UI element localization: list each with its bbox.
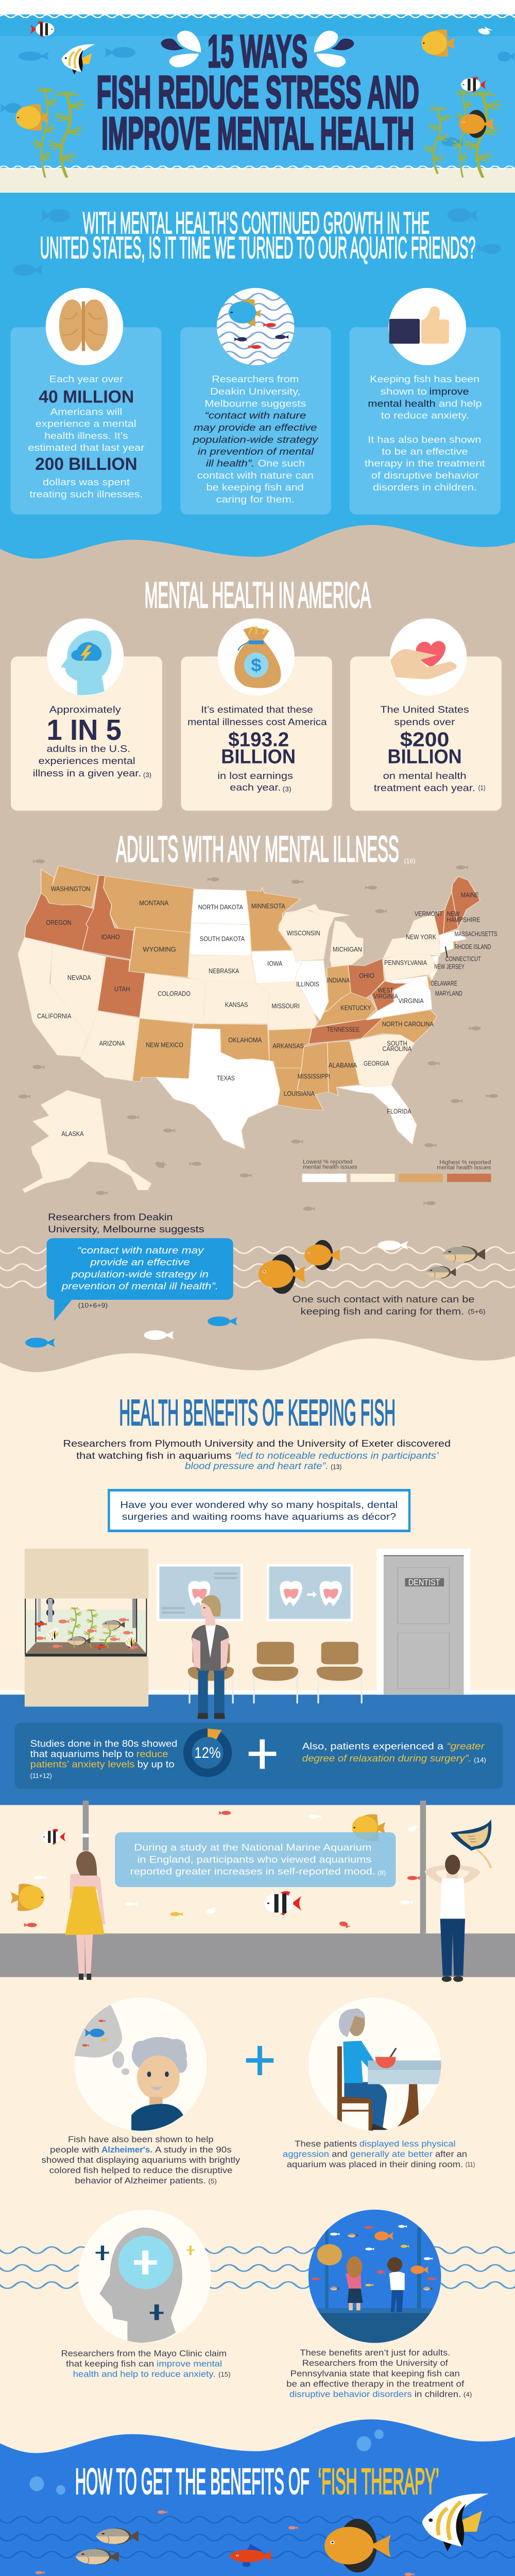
state labels: VIRGINIA: [399, 997, 424, 1005]
panel: keeping fish improves mental health: [350, 288, 501, 515]
text: Alzheimer's study: behavior of Alzheimer patients.: [75, 2176, 206, 2185]
illustration: dentist door: DENTIST: [408, 1578, 440, 1587]
state labels: SOUTH: [387, 1040, 407, 1047]
panel: 1 in 5 adults: [11, 618, 162, 811]
panel: 40 million: health illness. It’s: [44, 431, 128, 441]
icon: hand holding heart: [390, 641, 457, 679]
text: Mayo Clinic: that keeping fish can: [66, 2359, 154, 2369]
panel: 40 million: [10, 288, 162, 515]
fish group: [11, 1811, 420, 1929]
state labels: PENNSYLVANIA: [384, 959, 427, 967]
stat: 12 percent anxiety reduction: by up to: [138, 1759, 175, 1770]
callout: speech bubble quote: population-wide strategy in: [71, 1269, 209, 1279]
text: one such contact: [293, 1294, 486, 1317]
state labels: ALABAMA: [329, 1062, 357, 1070]
icon: head with storm cloud: [61, 630, 111, 695]
panel: Deakin University nature quote: contact with nature can: [197, 470, 314, 481]
text: Plymouth research: (13): [331, 1463, 341, 1470]
text: relaxation during surgery: “greater: [447, 1741, 485, 1752]
panel: keeping fish improves mental health: improve: [430, 386, 469, 397]
section: mental health in America: [11, 574, 502, 869]
panel: Deakin University nature quote: caring for them.: [216, 494, 295, 504]
panel: keeping fish improves mental health: and help: [439, 398, 482, 409]
stat: 12 percent anxiety reduction: (11+12): [30, 1772, 52, 1780]
state labels: CALIFORNIA: [37, 1012, 72, 1020]
state labels: MONTANA: [139, 900, 168, 907]
text: Mayo Clinic: (15): [218, 2370, 231, 2378]
state labels: NORTH CAROLINA: [382, 1021, 434, 1028]
chart: donut 12%: [183, 1728, 232, 1777]
state labels: UTAH: [114, 986, 130, 993]
callout: speech bubble quote: “contact with nature may: [77, 1245, 204, 1256]
panel: 1 in 5 adults: experiences mental: [39, 756, 135, 766]
text: Plymouth research: [63, 1438, 451, 1471]
reference marker: (10+6+9): [78, 1301, 108, 1309]
text: University of Pennsylvania: disruptive behavior disorders: [289, 2389, 412, 2399]
callout: question box: [108, 1489, 410, 1532]
state labels: KENTUCKY: [340, 1004, 371, 1012]
fish: hero fish group: [16, 21, 494, 138]
illustration: tooth poster 2: [267, 1564, 353, 1621]
text: Plymouth research: that watching fish in aquariums: [76, 1450, 232, 1461]
text: patients displayed less aggression: These patients: [295, 2139, 357, 2149]
callout: speech bubble quote: provide an effective: [90, 1257, 190, 1267]
panel: $193.2 billion lost earnings: each year.: [230, 782, 281, 792]
icon: money bag: $: [251, 655, 262, 675]
state labels: ARKANSAS: [272, 1042, 304, 1050]
panel: Deakin University nature quote: [180, 287, 331, 515]
illustration: man looking up: [425, 1855, 480, 1982]
section: Alzheimer's and benefit circles: (11): [466, 2161, 475, 2168]
state labels: NEVADA: [67, 974, 91, 982]
illustration: elderly woman thinking of fish: [74, 1996, 207, 2131]
fish group: [25, 1240, 485, 1348]
illustration: tooth poster 1: [157, 1564, 243, 1621]
state labels: LOUISIANA: [284, 1090, 315, 1098]
section: waiting room: [0, 1438, 515, 1805]
chart legend: Lowest % reported: [303, 1159, 352, 1165]
state labels: ILLINOIS: [296, 981, 319, 988]
panel: 1 in 5 adults: Approximately: [49, 704, 121, 715]
state labels: IOWA: [267, 960, 283, 968]
state labels: KANSAS: [225, 1001, 248, 1009]
state labels: WYOMING: [143, 946, 176, 954]
background ghost fish: [0, 47, 515, 276]
text: Mayo Clinic: Researchers from the Mayo Clinic claim: [61, 2349, 227, 2359]
panel: 40 million: Each year over: [49, 374, 123, 384]
stat: 12 percent anxiety reduction: [30, 1728, 232, 1780]
state labels: SOUTH DAKOTA: [200, 935, 245, 943]
state labels: MISSOURI: [271, 1003, 300, 1010]
text: Alzheimer's study: A study in the 90s: [155, 2145, 232, 2155]
state labels: MISSISSIPPI: [298, 1073, 330, 1080]
panel: 40 million: dollars was spent: [43, 477, 130, 487]
text: Mayo Clinic: [61, 2349, 231, 2379]
text: relaxation during surgery: (14): [474, 1756, 486, 1764]
callout: National Marine Aquarium study: in England, participants who viewed aquariums: [138, 1854, 371, 1865]
illustration: dentist door: [377, 1549, 470, 1694]
panel: $193.2 billion lost earnings: in lost earnings: [217, 770, 293, 781]
section: Alzheimer's and benefit circles: [0, 1996, 515, 2344]
state labels: VERMONT: [415, 910, 443, 918]
stat: 12 percent anxiety reduction: Studies done in the 80s showed: [30, 1738, 177, 1749]
callout: National Marine Aquarium study: During a study at the National Marine Aquarium: [134, 1842, 371, 1853]
panel: Deakin University nature quote: be keeping fish and: [207, 482, 304, 493]
icon: brain: [59, 299, 108, 351]
seaweed right: [425, 91, 500, 178]
text: University of Pennsylvania: (4): [464, 2391, 472, 2398]
state labels: ALASKA: [61, 1130, 84, 1138]
text: Alzheimer's study: people with: [50, 2145, 99, 2155]
state labels: TENNESSEE: [327, 1026, 359, 1033]
callout: National Marine Aquarium study: reported greater increases in self-reported mood.: [130, 1866, 375, 1877]
state labels: TEXAS: [217, 1075, 235, 1082]
section: fish therapy: [0, 2348, 515, 2576]
panel: keeping fish improves mental health: to reduce anxiety.: [381, 410, 469, 421]
state labels: MICHIGAN: [333, 946, 362, 954]
state labels: WISCONSIN: [287, 930, 320, 937]
heading: adults with any mental illness: (16): [404, 857, 416, 865]
section: hero title: [0, 14, 515, 276]
background small fish: [96, 1160, 436, 1211]
text: relaxation during surgery: [302, 1741, 486, 1764]
state labels: MARYLAND: [435, 990, 462, 997]
state labels: COLORADO: [158, 990, 191, 997]
panel: $193.2 billion lost earnings: BILLION: [221, 745, 296, 768]
stat panel background: [15, 1723, 503, 1789]
panel: 40 million: treating such illnesses.: [29, 489, 143, 499]
scene: public aquarium background: [0, 1801, 515, 1977]
text: patients displayed less aggression: displayed less physical: [359, 2139, 456, 2149]
panel: Deakin University nature quote: Deakin University,: [210, 386, 301, 397]
panel: $200 billion treatment: spends over: [394, 717, 455, 727]
state labels: NEW JERSEY: [434, 963, 465, 971]
text: Mayo Clinic: health and help to reduce anxiety.: [73, 2369, 215, 2379]
icon: money bag: [234, 626, 281, 688]
state labels: NEBRASKA: [209, 968, 239, 975]
icon: water splash left: [161, 31, 201, 67]
icon: thumbs up: [389, 306, 449, 344]
state labels: NORTH DAKOTA: [198, 904, 243, 911]
panel: 1 in 5 adults: (3): [143, 771, 151, 778]
icon: plus: [249, 1739, 276, 1769]
decorative bubbles: [29, 2430, 384, 2495]
panel: Deakin University nature quote: ill health”.: [206, 458, 254, 469]
stat: 12 percent anxiety reduction: reduce: [136, 1749, 168, 1759]
state labels: CAROLINA: [382, 1045, 411, 1053]
text: Alzheimer's study: Fish have also been shown to help: [68, 2135, 214, 2144]
state labels: WEST: [377, 987, 393, 994]
panel: 40 million: 200 BILLION: [35, 454, 138, 473]
illustration: head with plus symbols: [78, 2210, 211, 2344]
panel: Deakin University nature quote: “contact with nature: [204, 410, 306, 421]
state labels: NEW: [447, 910, 460, 918]
panel: $200 billion treatment: [350, 618, 502, 811]
seaweed left: [34, 88, 84, 178]
panel: Deakin University nature quote: Melbourne suggests: [204, 398, 306, 409]
text: Alzheimer's study: [41, 2135, 240, 2185]
panel: keeping fish improves mental health: shown to: [381, 386, 427, 397]
state labels: GEORGIA: [364, 1060, 389, 1067]
state labels: NEW MEXICO: [146, 1041, 183, 1049]
text: one such contact: (5+6): [468, 1308, 486, 1315]
text: Alzheimer's study: colored fish helped to reduce the disruptive: [49, 2166, 233, 2175]
state labels: IDAHO: [101, 934, 120, 941]
callout: National Marine Aquarium study: [115, 1832, 396, 1887]
background small fish: [19, 866, 498, 1147]
text: Deakin intro: [48, 1212, 204, 1234]
icon: water splash right: [314, 31, 354, 67]
text: patients displayed less aggression: after an: [435, 2149, 467, 2159]
text: relaxation during surgery: Also, patients experienced a: [302, 1741, 443, 1752]
illustration: waiting chairs: [188, 1642, 363, 1703]
panel: Deakin University nature quote: One such: [258, 458, 305, 469]
stat: 12 percent anxiety reduction: patients’ anxiety levels: [30, 1759, 134, 1770]
panel: $200 billion treatment: (1): [478, 784, 486, 791]
text: patients displayed less aggression: aggression: [283, 2149, 329, 2159]
illustration: children at aquarium: [305, 2210, 443, 2344]
text: patients displayed less aggression: generally ate better: [350, 2149, 433, 2159]
section: aquarium visitors: [0, 1728, 515, 1982]
state labels: [37, 885, 497, 1138]
panel: $193.2 billion lost earnings: It’s estimated that these: [201, 704, 313, 715]
state labels: MAINE: [461, 891, 479, 899]
text: patients displayed less aggression: and: [332, 2149, 348, 2159]
panel: 40 million: experience a mental: [36, 418, 136, 429]
state labels: INDIANA: [327, 977, 350, 984]
text: Deakin intro: University, Melbourne suggests: [48, 1224, 204, 1234]
text: patients displayed less aggression: [283, 2139, 475, 2170]
callout: speech bubble quote: prevention of mental ill health”.: [61, 1281, 218, 1292]
state labels: ARIZONA: [99, 1040, 125, 1047]
panel: 1 in 5 adults: 1 IN 5: [47, 714, 122, 747]
panel: 1 in 5 adults: illness in a given year.: [33, 768, 141, 778]
illustration: seated man: [192, 1595, 229, 1719]
section: US map: [18, 866, 498, 1193]
state labels: VIRGINIA: [373, 993, 398, 1000]
state labels: WASHINGTON: [51, 885, 90, 893]
text: University of Pennsylvania: [286, 2348, 472, 2399]
panel: keeping fish improves mental health: to be an effective: [382, 446, 468, 457]
fish group: [35, 2494, 489, 2576]
state labels: OREGON: [46, 919, 71, 926]
panel: $200 billion treatment: The United States: [381, 704, 469, 715]
state labels: FLORIDA: [387, 1108, 411, 1115]
text: Alzheimer's study: (5): [208, 2177, 217, 2185]
panel: Deakin University nature quote: population-wide strategy: [193, 434, 319, 445]
state labels: OKLAHOMA: [228, 1037, 262, 1044]
panel: $193.2 billion lost earnings: $193.2: [228, 728, 289, 751]
text: University of Pennsylvania: in children.: [415, 2389, 461, 2399]
callout: speech bubble quote: [47, 1238, 233, 1321]
panel: $193.2 billion lost earnings: mental illnesses cost America: [187, 717, 327, 727]
text: Plymouth research: blood pressure and heart rate”.: [185, 1461, 329, 1471]
panel: keeping fish improves mental health: mental health: [368, 398, 436, 409]
panel: 40 million: 40 MILLION: [39, 386, 134, 406]
panel: Deakin University nature quote: Researchers from: [212, 374, 299, 384]
chart legend: [302, 1159, 491, 1182]
subheading: aquatic friends question: [40, 207, 475, 265]
illustration: aquarium on cabinet: [25, 1549, 148, 1706]
panel: $193.2 billion lost earnings: (3): [282, 785, 291, 793]
panel: $200 billion treatment: on mental health: [383, 770, 467, 781]
state labels: MINNESOTA: [251, 903, 285, 910]
icon: fish in waves: [217, 293, 295, 365]
panel: $193.2 billion lost earnings: [181, 618, 332, 811]
panel: 40 million: Americans will: [50, 406, 122, 417]
section: intro stat panels: [0, 288, 515, 515]
icon: plus between circles: [246, 2046, 273, 2075]
panel: 1 in 5 adults: adults in the U.S.: [47, 743, 130, 754]
text: Mayo Clinic: improve mental: [157, 2359, 222, 2369]
panel: $200 billion treatment: $200: [400, 728, 449, 751]
state labels: DELAWARE: [431, 980, 457, 987]
chart: choropleth map of US states: [18, 866, 480, 1193]
text: Alzheimer's study: showed that displaying aquariums with brightly: [41, 2156, 240, 2165]
stat: 12 percent anxiety reduction: that aquariums help to: [30, 1749, 134, 1759]
text: Alzheimer's study: Alzheimer's.: [101, 2145, 152, 2155]
text: Deakin intro: Researchers from Deakin: [48, 1212, 173, 1223]
panel: 40 million: estimated that last year: [28, 442, 145, 453]
panel: Deakin University nature quote: may provide an effective: [194, 422, 317, 433]
chart legend: mental health issues: [303, 1164, 357, 1170]
chart: donut 12%: 12%: [195, 1744, 221, 1761]
title: [97, 26, 419, 159]
state labels: NEW YORK: [406, 934, 436, 941]
illustration: manta ray: [451, 1819, 491, 1868]
callout: National Marine Aquarium study: (8): [377, 1869, 386, 1876]
state labels: OHIO: [359, 972, 374, 979]
illustration: patient eating at table: [308, 1997, 441, 2131]
section: map legend and Deakin quote: [0, 1159, 515, 1433]
panel: Deakin University nature quote: in prevention of mental: [198, 446, 314, 457]
illustration: woman in yellow dress: [65, 1851, 105, 1980]
